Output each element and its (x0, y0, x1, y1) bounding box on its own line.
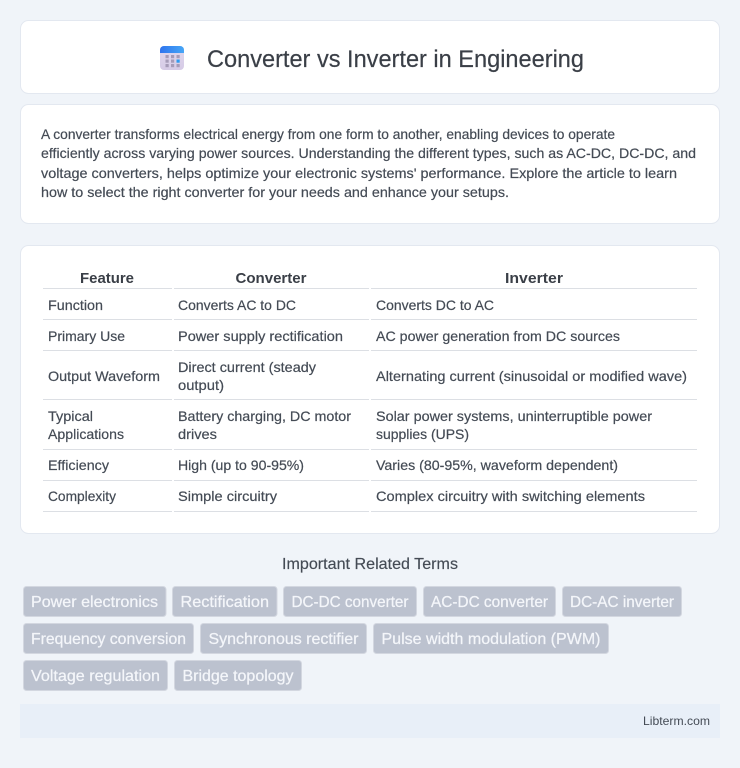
related terms tags: DC-DC converter (292, 594, 409, 611)
row: primary use: Primary Use (48, 328, 125, 344)
related terms heading: Important Related Terms (282, 556, 458, 573)
header panel (20, 20, 720, 94)
row: typical applications: Applications (48, 426, 124, 442)
row: typical applications (48, 408, 652, 442)
row: complexity: Simple circuitry (178, 488, 277, 504)
row: complexity (48, 488, 645, 504)
row: output waveform: Alternating current (sinusoidal or modified wave) (376, 368, 687, 384)
intro text: efficiently across varying power sources. Understanding the different types, such as AC-DC, DC-DC, and (41, 145, 696, 161)
related terms tags: Voltage regulation (31, 668, 160, 685)
related terms tags: Rectification (180, 594, 269, 611)
row: output waveform (48, 359, 687, 393)
table header: Feature (80, 270, 134, 287)
row: typical applications: Solar power systems, uninterruptible power (376, 408, 652, 424)
related terms tags (24, 586, 682, 690)
comparison table panel (20, 246, 720, 534)
related terms tags: AC-DC converter (431, 594, 549, 611)
row: efficiency (48, 457, 618, 473)
related terms tags: DC-AC inverter (570, 594, 675, 611)
table header: Converter (236, 270, 307, 287)
related terms tags: Pulse width modulation (PWM) (382, 631, 600, 648)
row: typical applications: drives (178, 426, 217, 442)
intro panel (20, 104, 720, 224)
row: output waveform: output) (178, 377, 224, 393)
related terms tags: Bridge topology (182, 668, 294, 685)
related terms tags: Power electronics (31, 594, 158, 611)
row: typical applications: supplies (UPS) (376, 426, 469, 442)
footer credit: Libterm.com (643, 714, 710, 728)
row: primary use: AC power generation from DC sources (376, 328, 620, 344)
row: complexity: Complexity (48, 488, 116, 504)
intro text: voltage converters, helps optimize your electronic systems' performance. Explore the article to learn (41, 165, 677, 181)
row: function (48, 297, 494, 313)
row: primary use: Power supply rectification (178, 328, 343, 344)
row: function: Function (48, 297, 103, 313)
row: typical applications: Battery charging, DC motor (178, 408, 351, 424)
row: typical applications: Typical (48, 408, 93, 424)
intro text: how to select the right converter for your needs and enhance your setups. (41, 184, 509, 200)
row: output waveform: Direct current (steady (178, 359, 316, 375)
icon: calendar (160, 46, 184, 70)
row: function: Converts AC to DC (178, 297, 296, 313)
row: output waveform: Output Waveform (48, 368, 160, 384)
row: complexity: Complex circuitry with switching elements (376, 488, 645, 504)
row: primary use (48, 328, 620, 344)
related terms tags: Synchronous rectifier (208, 631, 359, 648)
row: efficiency: Varies (80-95%, waveform dependent) (376, 457, 618, 473)
related terms tags: Frequency conversion (31, 631, 186, 648)
row: efficiency: High (up to 90-95%) (178, 457, 304, 473)
intro text: A converter transforms electrical energy from one form to another, enabling devices to operate (41, 126, 615, 142)
table header (80, 270, 563, 287)
table header: Inverter (505, 270, 563, 287)
row: efficiency: Efficiency (48, 457, 109, 473)
intro text (41, 126, 696, 200)
footer (20, 704, 720, 738)
row: function: Converts DC to AC (376, 297, 494, 313)
title: Converter vs Inverter in Engineering (207, 46, 584, 73)
